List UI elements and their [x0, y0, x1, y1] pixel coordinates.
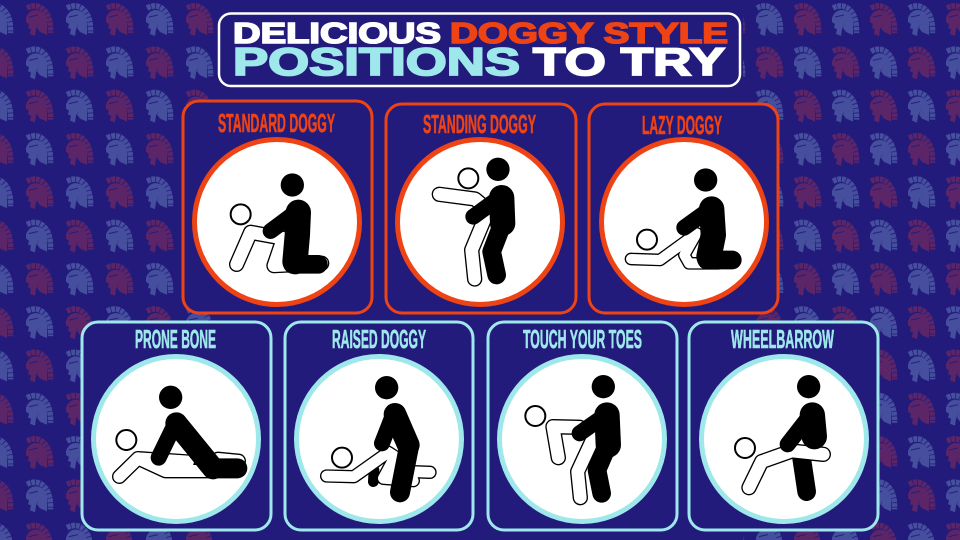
panel: wheelbarrow: WHEELBARROW [731, 324, 834, 354]
panel: touch your toes [488, 322, 677, 530]
panel: standard doggy: STANDARD DOGGY [218, 108, 335, 138]
title line 2: TO TRY [533, 41, 725, 84]
panel: raised doggy [285, 322, 473, 530]
circle [296, 356, 462, 522]
panel: lazy doggy: LAZY DOGGY [642, 110, 722, 140]
icon: raised doggy figures [327, 376, 430, 492]
circle [398, 140, 562, 304]
title banner [219, 14, 740, 86]
title line 1 [233, 18, 728, 50]
panel: prone bone [82, 322, 271, 530]
icon: prone bone figures [116, 386, 239, 477]
panel: prone bone: PRONE BONE [135, 324, 216, 354]
icon: standing doggy figures [439, 158, 510, 279]
title line 1: DELICIOUS [233, 18, 441, 50]
icon: wheelbarrow figures [735, 375, 823, 492]
circle [194, 140, 360, 304]
circle [500, 356, 664, 522]
circle [602, 140, 766, 304]
icon: lazy doggy figures [631, 168, 732, 263]
panel: lazy doggy [589, 104, 778, 313]
helmet pattern left [0, 0, 216, 540]
panel: touch your toes: TOUCH YOUR TOES [523, 324, 642, 354]
panel: standing doggy: STANDING DOGGY [423, 109, 536, 139]
circle [702, 356, 866, 522]
title line 2: POSITIONS [233, 41, 520, 84]
title line 1: DOGGY STYLE [450, 18, 728, 50]
helmet pattern right [743, 0, 960, 540]
panel: standard doggy [183, 101, 372, 313]
panel: raised doggy: RAISED DOGGY [332, 324, 426, 354]
icon: standard doggy figures [231, 173, 322, 266]
panel: standing doggy [386, 104, 576, 313]
icon: touch your toes figures [525, 375, 615, 498]
title line 2 [233, 41, 725, 84]
circle [94, 356, 258, 522]
panel: wheelbarrow [689, 322, 878, 530]
